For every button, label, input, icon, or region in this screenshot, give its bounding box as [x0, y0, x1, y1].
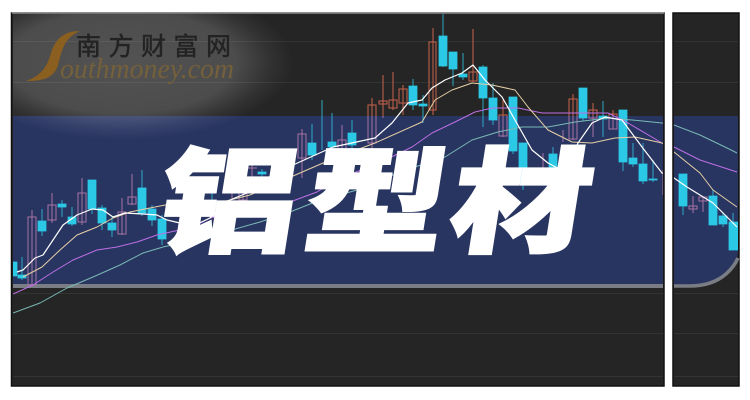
icon: logo swoosh — [26, 31, 80, 81]
watermark glow — [13, 14, 278, 133]
line: MA60 teal — [13, 118, 737, 313]
blue band: main panel — [13, 116, 663, 288]
line: MA20 purple — [13, 108, 737, 294]
title glyph: type: 型 — [297, 141, 457, 268]
line: MA5 white — [17, 65, 737, 272]
filled candles — [13, 13, 738, 280]
logo: southmoney — [26, 31, 239, 85]
hollow candles above band — [368, 28, 618, 116]
panel: right chart — [673, 13, 739, 386]
logo url: outhmoney.com — [60, 53, 234, 85]
line: MA10 cream — [23, 83, 737, 277]
band edge: right panel curve — [674, 258, 738, 286]
title glyph: material: 材 — [442, 141, 602, 268]
title — [150, 141, 602, 268]
moving average lines — [13, 65, 737, 313]
title glyph: aluminium: 铝 — [150, 141, 310, 268]
hollow candles inside band — [28, 116, 708, 286]
candlesticks — [13, 13, 738, 286]
blue band: right panel with rounded corner — [674, 116, 738, 286]
logo chinese name: 南方财富网 — [76, 33, 239, 61]
